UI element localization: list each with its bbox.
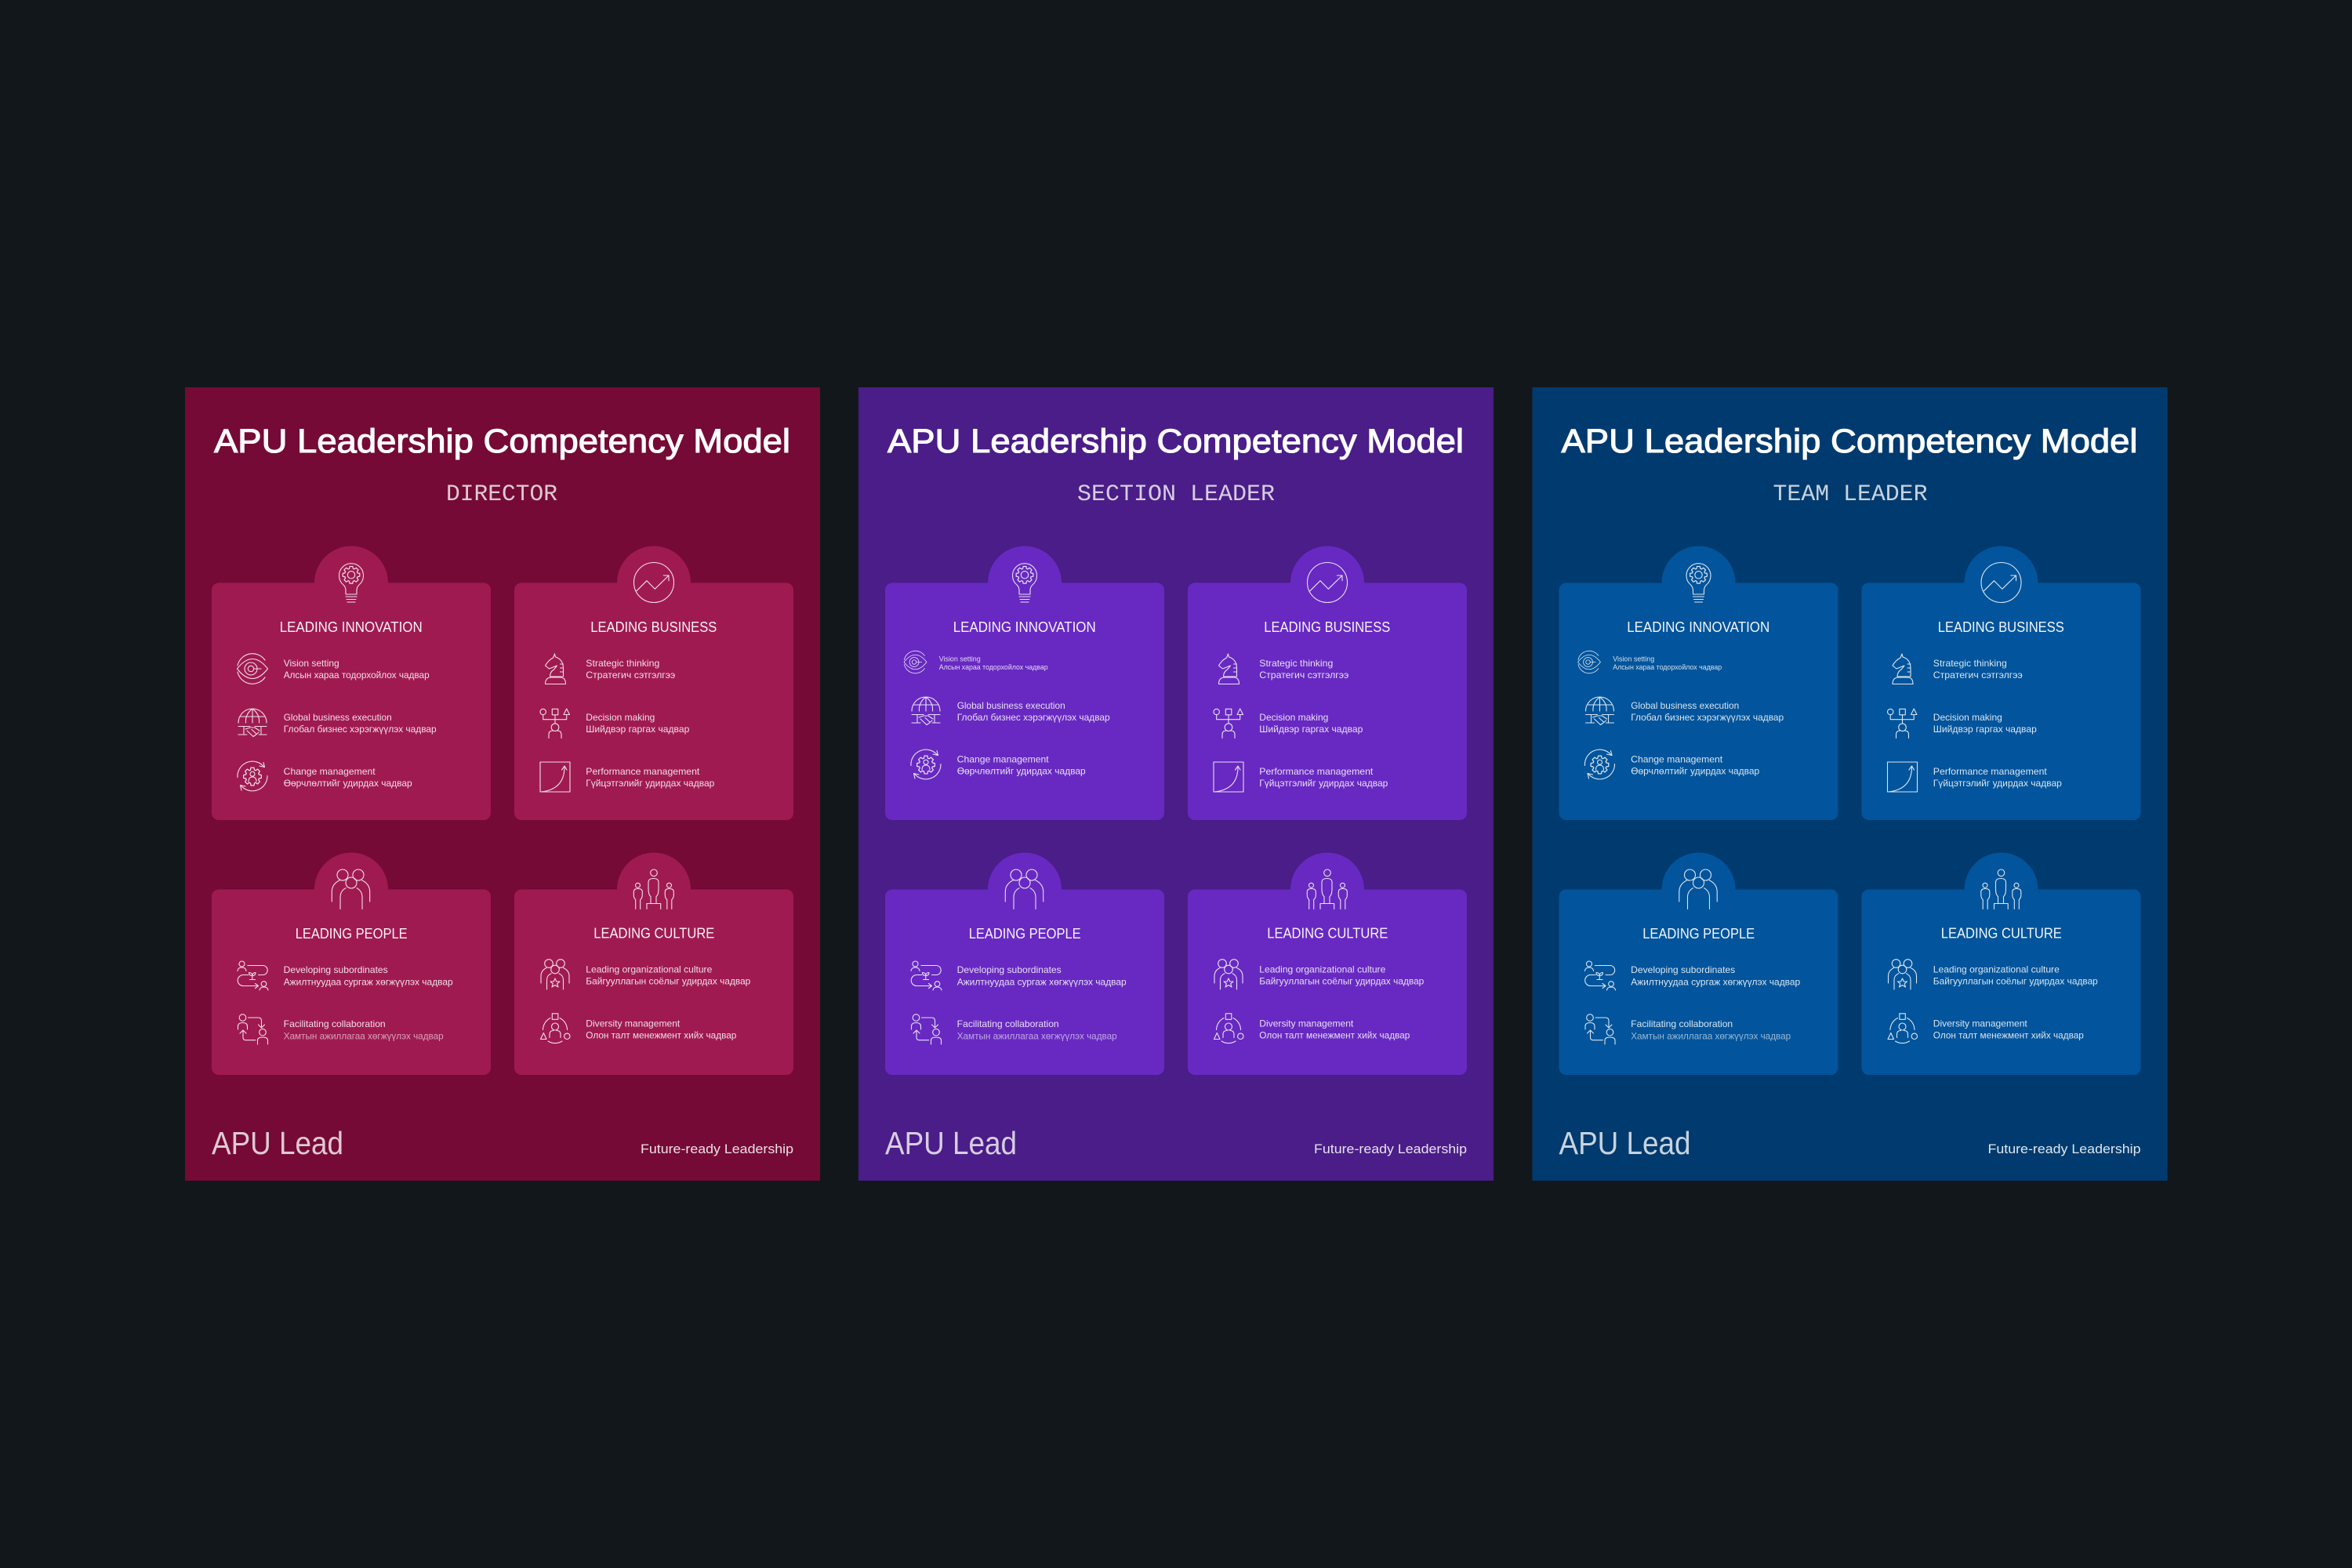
item text: Developing subordinates: [1631, 964, 1735, 975]
item text: Глобал бизнес хэрэгжүүлэх чадвар: [284, 724, 437, 735]
item: developing subordinates: [1585, 961, 1801, 990]
heading: LEADING PEOPLE: [1642, 926, 1755, 942]
icon: organization: [1888, 960, 1916, 989]
icon: collaboration: [1585, 1014, 1615, 1044]
icon: develop: [238, 961, 268, 990]
item text: Шийдвэр гаргах чадвар: [1259, 724, 1363, 735]
item text: Diversity management: [1259, 1018, 1354, 1029]
heading: LEADING CULTURE: [1267, 925, 1388, 941]
icon: change cycle: [911, 750, 941, 779]
item text: Vision setting: [939, 655, 981, 662]
icon: collaboration: [911, 1014, 941, 1044]
icon: performance chart: [540, 762, 570, 792]
item text: [1259, 712, 1363, 735]
item text: Facilitating collaboration: [957, 1018, 1059, 1029]
icon: eye: [237, 654, 268, 684]
item text: Алсын хараа тодорхойлох чадвар: [939, 663, 1048, 671]
item text: [1613, 655, 1722, 671]
panel card: [514, 546, 793, 820]
item text: Олон талт менежмент хийх чадвар: [1933, 1030, 2084, 1041]
item text: Стратегич сэтгэлгээ: [1933, 670, 2023, 681]
item text: Leading organizational culture: [586, 964, 713, 975]
brand wordmark: APU Lead: [1559, 1125, 1690, 1161]
item: decision making: [1214, 709, 1363, 739]
role label: DIRECTOR: [446, 481, 557, 507]
panel card: [212, 853, 491, 1075]
title: APU Leadership Competency Model: [887, 423, 1464, 460]
icon: chess knight: [1893, 654, 1913, 684]
role label: TEAM LEADER: [1773, 481, 1927, 507]
panel card: [1861, 546, 2140, 820]
item text: Change management: [957, 754, 1049, 765]
item text: Global business execution: [284, 712, 392, 723]
item: leading organizational culture: [1214, 960, 1425, 989]
item text: Facilitating collaboration: [1631, 1018, 1733, 1029]
item text: Олон талт менежмент хийх чадвар: [1259, 1030, 1410, 1041]
item text: [1259, 1018, 1410, 1041]
item: leading organizational culture: [541, 960, 751, 989]
panel: leading business: [1188, 546, 1467, 820]
role label: SECTION LEADER: [1077, 481, 1275, 507]
icon: diversity: [1888, 1014, 1918, 1044]
icon: diversity: [541, 1014, 570, 1044]
panel: leading business: [1861, 546, 2140, 820]
heading: LEADING BUSINESS: [1938, 619, 2064, 635]
icon: chess knight: [1218, 654, 1239, 684]
item text: Хамтын ажиллагаа хөгжүүлэх чадвар: [1631, 1030, 1791, 1041]
icon: trend: [1981, 563, 2021, 602]
panel: leading culture: [1861, 853, 2140, 1075]
icon: culture: [1981, 869, 2021, 909]
item text: [284, 1018, 444, 1041]
panel card: [1188, 546, 1467, 820]
tagline: Future-ready Leadership: [1988, 1142, 2140, 1156]
item: strategic thinking: [1218, 654, 1348, 684]
item text: Алсын хараа тодорхойлох чадвар: [1613, 663, 1722, 671]
item: decision making: [540, 709, 690, 739]
title: APU Leadership Competency Model: [214, 423, 790, 460]
item text: [1631, 700, 1784, 723]
icon: people: [332, 869, 370, 909]
panel card: [1559, 853, 1838, 1075]
panel card: [885, 546, 1164, 820]
item text: Facilitating collaboration: [284, 1018, 386, 1029]
item text: Performance management: [1933, 766, 2047, 777]
item text: Decision making: [1933, 712, 2002, 723]
heading: LEADING BUSINESS: [1264, 619, 1390, 635]
panel card: [1861, 853, 2140, 1075]
item: diversity management: [541, 1014, 737, 1044]
item text: [586, 964, 751, 987]
heading: LEADING PEOPLE: [296, 926, 408, 942]
heading: LEADING INNOVATION: [280, 619, 423, 635]
poster: Section Leader: [858, 387, 1494, 1181]
item text: Шийдвэр гаргах чадвар: [586, 724, 690, 735]
icon: trend: [1308, 563, 1347, 602]
item text: Diversity management: [586, 1018, 681, 1029]
item text: [284, 766, 412, 789]
item text: Гүйцэтгэлийг удирдах чадвар: [586, 778, 715, 789]
icon: organization: [1214, 960, 1243, 989]
icon: develop: [911, 961, 942, 990]
panel: leading business: [514, 546, 793, 820]
item text: Strategic thinking: [1933, 658, 2007, 669]
item: developing subordinates: [911, 961, 1127, 990]
item text: [957, 964, 1127, 988]
brand wordmark: APU Lead: [885, 1125, 1017, 1161]
item text: [957, 700, 1110, 723]
item text: [586, 712, 690, 735]
item text: Хамтын ажиллагаа хөгжүүлэх чадвар: [284, 1030, 444, 1041]
icon: change cycle: [1584, 750, 1615, 779]
icon: performance chart: [1214, 762, 1243, 792]
item text: Хамтын ажиллагаа хөгжүүлэх чадвар: [957, 1030, 1117, 1041]
item text: Performance management: [1259, 766, 1374, 777]
poster: Director: [185, 387, 820, 1181]
item text: Гүйцэтгэлийг удирдах чадвар: [1259, 778, 1388, 789]
item text: Стратегич сэтгэлгээ: [1259, 670, 1348, 681]
item text: Стратегич сэтгэлгээ: [586, 670, 675, 681]
icon: decision: [1888, 709, 1917, 739]
item: vision setting: [1578, 651, 1722, 673]
item text: Ажилтнуудаа сургаж хөгжүүлэх чадвар: [284, 977, 453, 988]
item text: Developing subordinates: [957, 964, 1062, 975]
icon: decision: [540, 709, 569, 739]
item text: [586, 1018, 737, 1041]
item text: Олон талт менежмент хийх чадвар: [586, 1030, 737, 1041]
item: change management: [1584, 750, 1760, 779]
heading: LEADING INNOVATION: [953, 619, 1096, 635]
icon: light bulb: [1013, 564, 1036, 602]
poster background: [185, 387, 820, 1181]
icon: globe handshake: [238, 709, 267, 737]
title: APU Leadership Competency Model: [1562, 423, 2137, 460]
item text: Change management: [284, 766, 376, 777]
icon: chess knight: [546, 654, 566, 684]
item text: Шийдвэр гаргах чадвар: [1933, 724, 2037, 735]
item: change management: [238, 761, 412, 791]
item text: [1259, 964, 1425, 987]
panel: leading people: [885, 853, 1164, 1075]
icon: collaboration: [238, 1014, 268, 1044]
item: performance management: [1888, 762, 2062, 792]
poster background: [1532, 387, 2167, 1181]
item text: [1933, 1018, 2084, 1041]
panel card: [1559, 546, 1838, 820]
item text: [586, 658, 675, 681]
item: change management: [911, 750, 1086, 779]
brand wordmark: APU Lead: [212, 1125, 343, 1161]
heading: LEADING PEOPLE: [969, 926, 1081, 942]
panel: leading culture: [1188, 853, 1467, 1075]
item text: Global business execution: [1631, 700, 1739, 711]
item text: Глобал бизнес хэрэгжүүлэх чадвар: [957, 712, 1110, 723]
heading: LEADING CULTURE: [593, 925, 714, 941]
item text: [1933, 712, 2037, 735]
item text: Байгууллагын соёлыг удирдах чадвар: [586, 976, 751, 987]
icon: eye: [904, 651, 927, 673]
item text: [1631, 754, 1760, 777]
item text: Өөрчлөлтийг удирдах чадвар: [284, 778, 412, 789]
item text: Байгууллагын соёлыг удирдах чадвар: [1933, 976, 2098, 987]
item text: Performance management: [586, 766, 700, 777]
item: developing subordinates: [238, 961, 453, 990]
panel: leading culture: [514, 853, 793, 1075]
item: facilitating collaboration: [911, 1014, 1117, 1044]
item text: Leading organizational culture: [1933, 964, 2060, 975]
item text: [1631, 1018, 1791, 1041]
panel: leading people: [1559, 853, 1838, 1075]
item: facilitating collaboration: [1585, 1014, 1791, 1044]
panel card: [514, 853, 793, 1075]
item: strategic thinking: [546, 654, 675, 684]
item text: Алсын хараа тодорхойлох чадвар: [284, 670, 430, 681]
item text: [957, 754, 1086, 777]
icon: culture: [1307, 869, 1347, 909]
item text: [1259, 658, 1348, 681]
icon: culture: [633, 869, 673, 909]
icon: decision: [1214, 709, 1243, 739]
icon: light bulb: [1686, 564, 1711, 602]
item text: [586, 766, 715, 789]
item text: Vision setting: [284, 658, 339, 669]
item text: Байгууллагын соёлыг удирдах чадвар: [1259, 976, 1425, 987]
item: global business execution: [912, 697, 1110, 724]
item text: Decision making: [586, 712, 655, 723]
item text: [284, 658, 430, 681]
icon: people: [1005, 869, 1044, 909]
panel card: [212, 546, 491, 820]
item text: Vision setting: [1613, 655, 1654, 662]
item text: [284, 964, 453, 988]
item text: Өөрчлөлтийг удирдах чадвар: [1631, 766, 1760, 777]
item text: Глобал бизнес хэрэгжүүлэх чадвар: [1631, 712, 1784, 723]
icon: eye: [1578, 651, 1600, 673]
item text: [1259, 766, 1388, 789]
item text: [957, 1018, 1117, 1041]
item: diversity management: [1214, 1014, 1410, 1044]
heading: LEADING BUSINESS: [590, 619, 717, 635]
item text: Diversity management: [1933, 1018, 2027, 1029]
item text: Change management: [1631, 754, 1723, 765]
item text: Developing subordinates: [284, 964, 388, 975]
item text: Leading organizational culture: [1259, 964, 1386, 975]
item text: [284, 712, 437, 735]
item: decision making: [1888, 709, 2037, 739]
item: strategic thinking: [1893, 654, 2023, 684]
item: global business execution: [1585, 697, 1784, 724]
heading: LEADING INNOVATION: [1627, 619, 1769, 635]
panel: leading people: [212, 853, 491, 1075]
panel: leading innovation: [1559, 546, 1838, 820]
poster background: [858, 387, 1494, 1181]
item: facilitating collaboration: [238, 1014, 444, 1044]
item text: Strategic thinking: [586, 658, 659, 669]
item: global business execution: [238, 709, 437, 737]
icon: globe handshake: [1585, 697, 1613, 724]
icon: trend: [633, 563, 674, 602]
heading: LEADING CULTURE: [1941, 925, 2062, 941]
icon: diversity: [1214, 1014, 1243, 1044]
icon: change cycle: [238, 761, 267, 791]
item: performance management: [540, 762, 715, 792]
item: diversity management: [1888, 1014, 2084, 1044]
tagline: Future-ready Leadership: [1314, 1142, 1467, 1156]
panel: leading innovation: [885, 546, 1164, 820]
icon: people: [1679, 869, 1717, 909]
icon: globe handshake: [912, 697, 940, 724]
icon: develop: [1585, 961, 1615, 990]
panel: leading innovation: [212, 546, 491, 820]
icon: organization: [541, 960, 569, 989]
item text: Decision making: [1259, 712, 1328, 723]
item text: [1933, 658, 2023, 681]
item text: [1933, 766, 2062, 789]
icon: performance chart: [1888, 762, 1918, 792]
item text: [939, 655, 1048, 671]
item: performance management: [1214, 762, 1388, 792]
item text: Ажилтнуудаа сургаж хөгжүүлэх чадвар: [957, 977, 1127, 988]
item: vision setting: [237, 654, 430, 684]
item text: Ажилтнуудаа сургаж хөгжүүлэх чадвар: [1631, 977, 1801, 988]
item text: Global business execution: [957, 700, 1065, 711]
item: leading organizational culture: [1888, 960, 2098, 989]
item text: Гүйцэтгэлийг удирдах чадвар: [1933, 778, 2062, 789]
poster: Team Leader: [1532, 387, 2167, 1181]
item text: [1933, 964, 2098, 987]
icon: light bulb: [339, 564, 364, 602]
panel card: [885, 853, 1164, 1075]
tagline: Future-ready Leadership: [641, 1142, 793, 1156]
item: vision setting: [904, 651, 1048, 673]
item text: Strategic thinking: [1259, 658, 1333, 669]
panel card: [1188, 853, 1467, 1075]
item text: Өөрчлөлтийг удирдах чадвар: [957, 766, 1086, 777]
item text: [1631, 964, 1801, 988]
